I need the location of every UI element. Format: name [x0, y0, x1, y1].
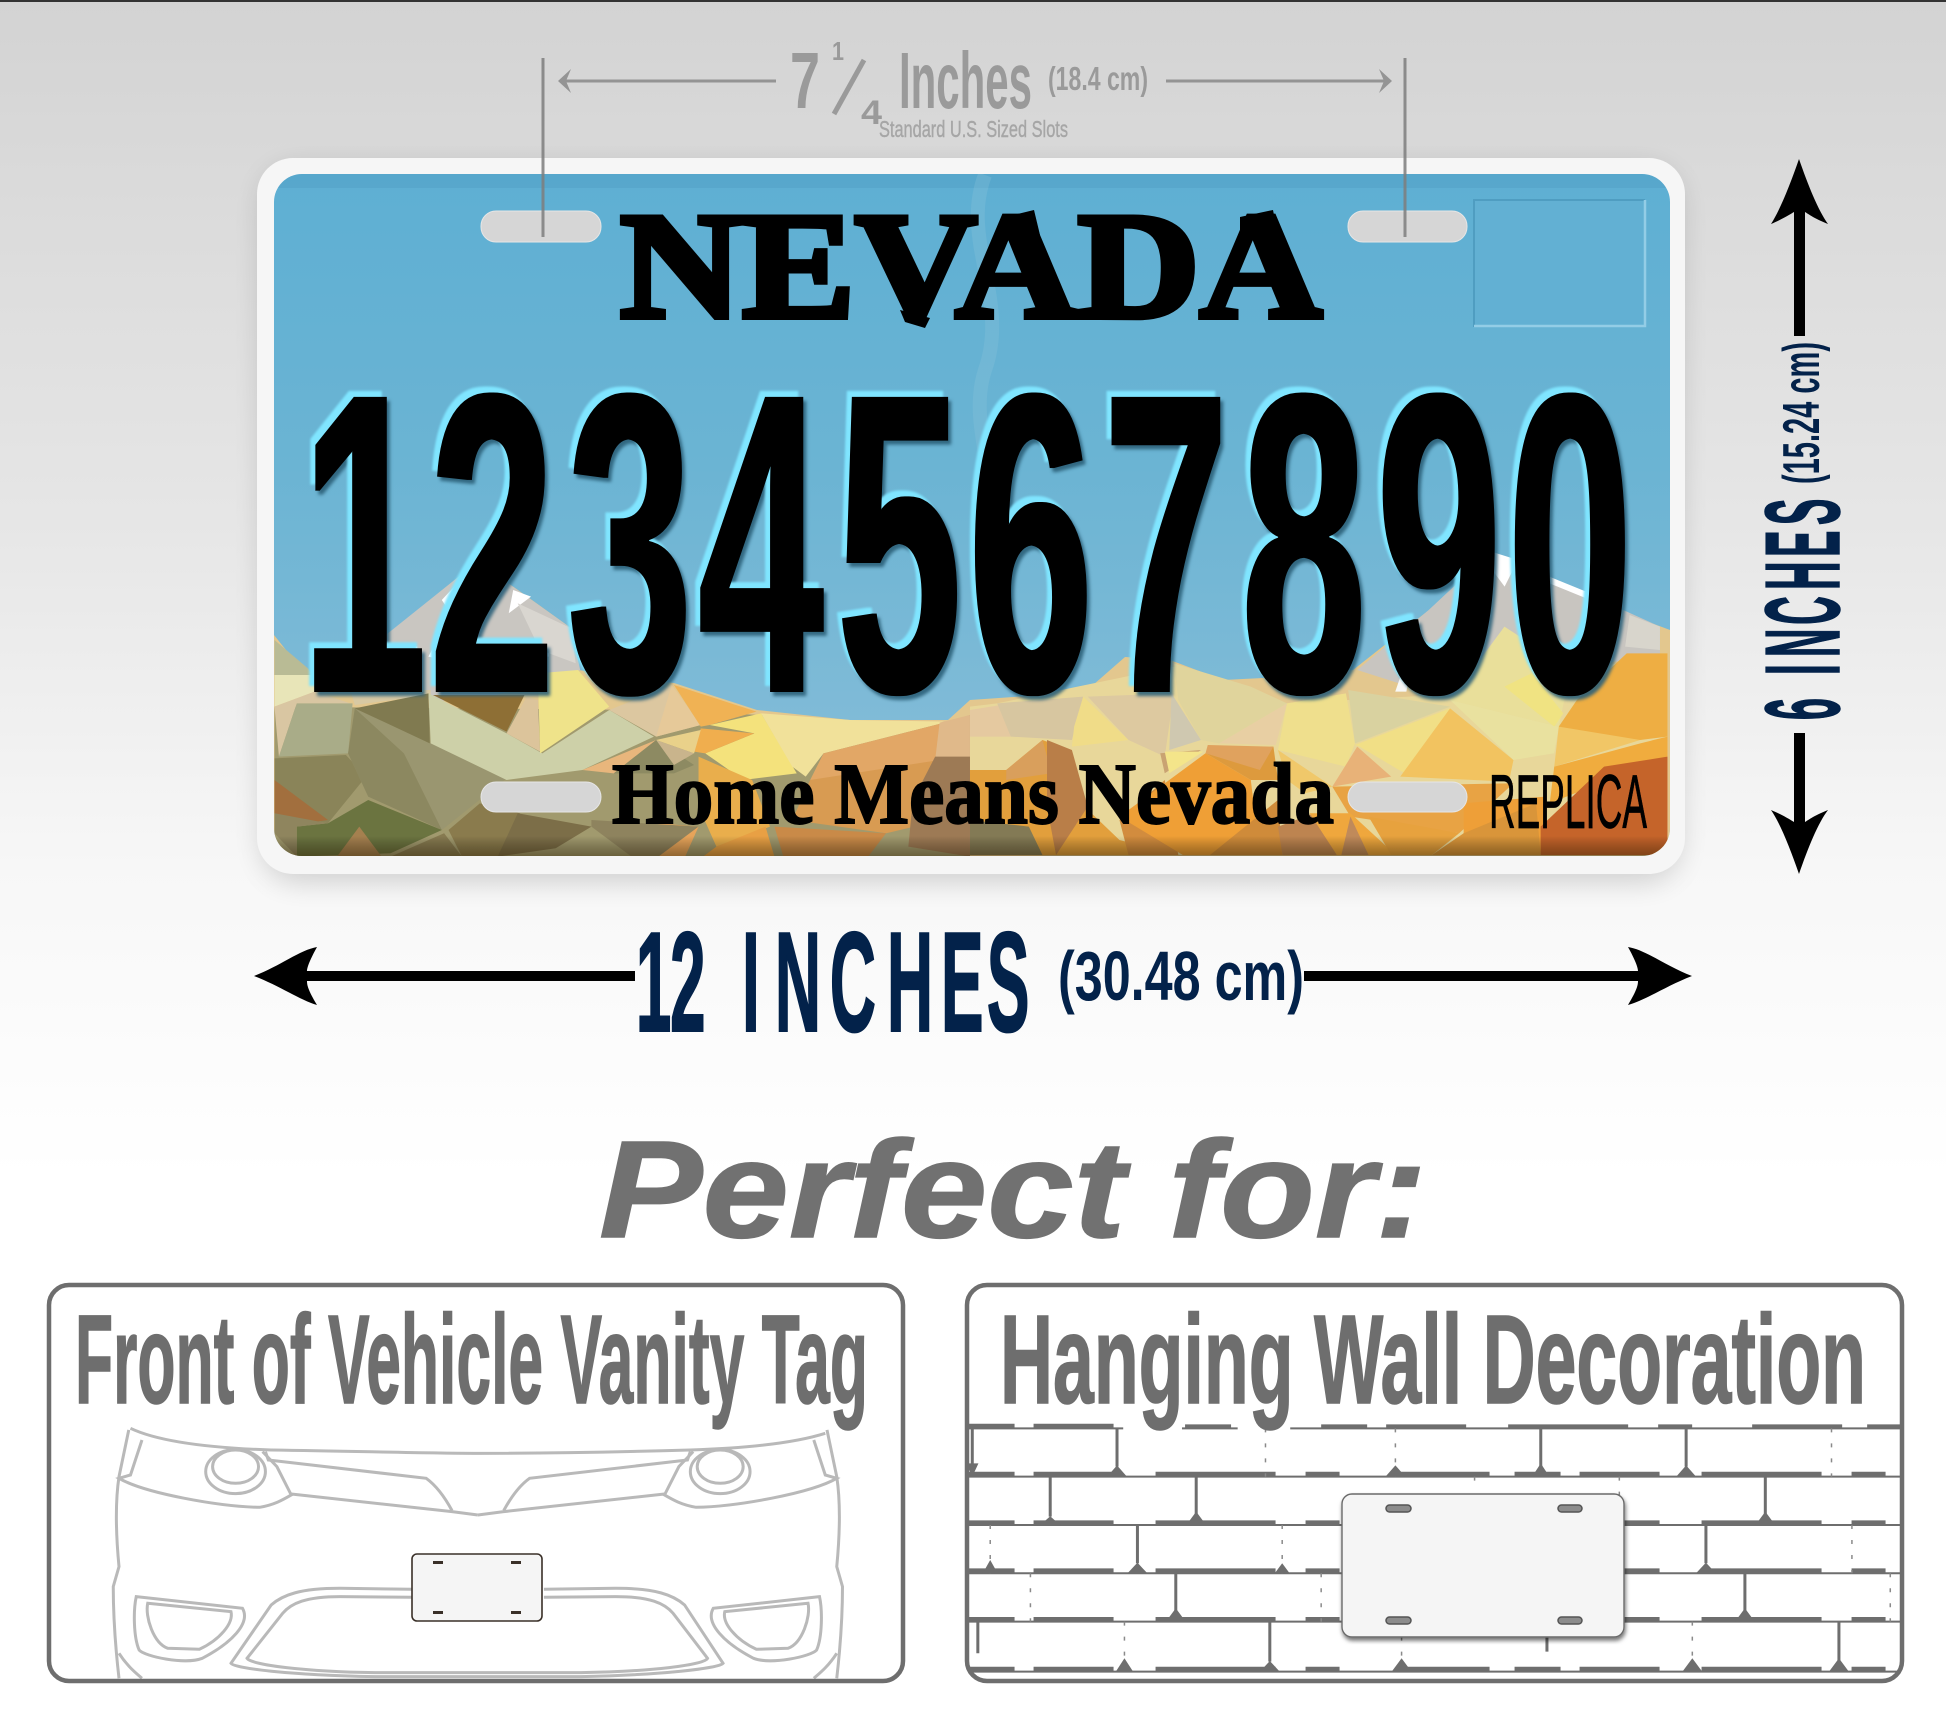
height metric label: (15.24 cm)	[1773, 342, 1831, 484]
brick wall	[966, 1426, 1903, 1672]
width metric label: (30.48 cm)	[1058, 937, 1304, 1015]
arrow: height down	[1771, 733, 1828, 874]
blank plate on wall	[1342, 1494, 1624, 1637]
slot spacing label	[790, 36, 1148, 142]
small blank plate	[412, 1554, 542, 1621]
license plate: REPLICA	[1489, 760, 1647, 845]
slot spacing label: Inches	[899, 36, 1032, 125]
slot guide lines	[543, 58, 1405, 237]
arrow: width left	[254, 947, 635, 1005]
panel: hanging wall decoration	[966, 1285, 1903, 1681]
license plate	[257, 158, 1685, 882]
arrow: right slot spacing	[1166, 69, 1392, 93]
plate white border	[257, 158, 1685, 874]
arrow: height up	[1771, 159, 1828, 336]
slogan: Home Means Nevada	[612, 745, 1334, 842]
low-poly mountains left	[274, 640, 970, 857]
plate artwork	[274, 174, 1670, 857]
panel: front of vehicle	[49, 1285, 903, 1681]
slot spacing label: (18.4 cm)	[1048, 60, 1148, 97]
height dimension	[1744, 159, 1862, 874]
width label: 12 INCHES	[636, 903, 1029, 1062]
slot spacing label: 1	[832, 36, 844, 66]
slot spacing label: Standard U.S. Sized Slots	[879, 116, 1068, 142]
plate number: 1234567890	[302, 304, 1632, 784]
width dimension	[254, 903, 1692, 1062]
arrow: width right	[1304, 947, 1692, 1005]
height label: 6 INCHES	[1744, 499, 1862, 720]
state name: NEVADA	[620, 182, 1322, 350]
slot spacing dimension	[543, 36, 1405, 237]
slot spacing label: 4	[861, 94, 882, 132]
snow peaks	[335, 552, 1660, 703]
arrow: left slot spacing	[558, 69, 776, 93]
slot spacing label: 7	[790, 36, 820, 125]
car front line drawing	[113, 1428, 842, 1678]
heading: perfect for: Perfect for:	[599, 1113, 1427, 1267]
low-poly mountains right	[970, 627, 1667, 855]
panel: front of vehicle: Front of Vehicle Vanity Tag	[75, 1289, 868, 1430]
sticker square	[1474, 200, 1645, 327]
mounting slots	[481, 211, 1467, 812]
